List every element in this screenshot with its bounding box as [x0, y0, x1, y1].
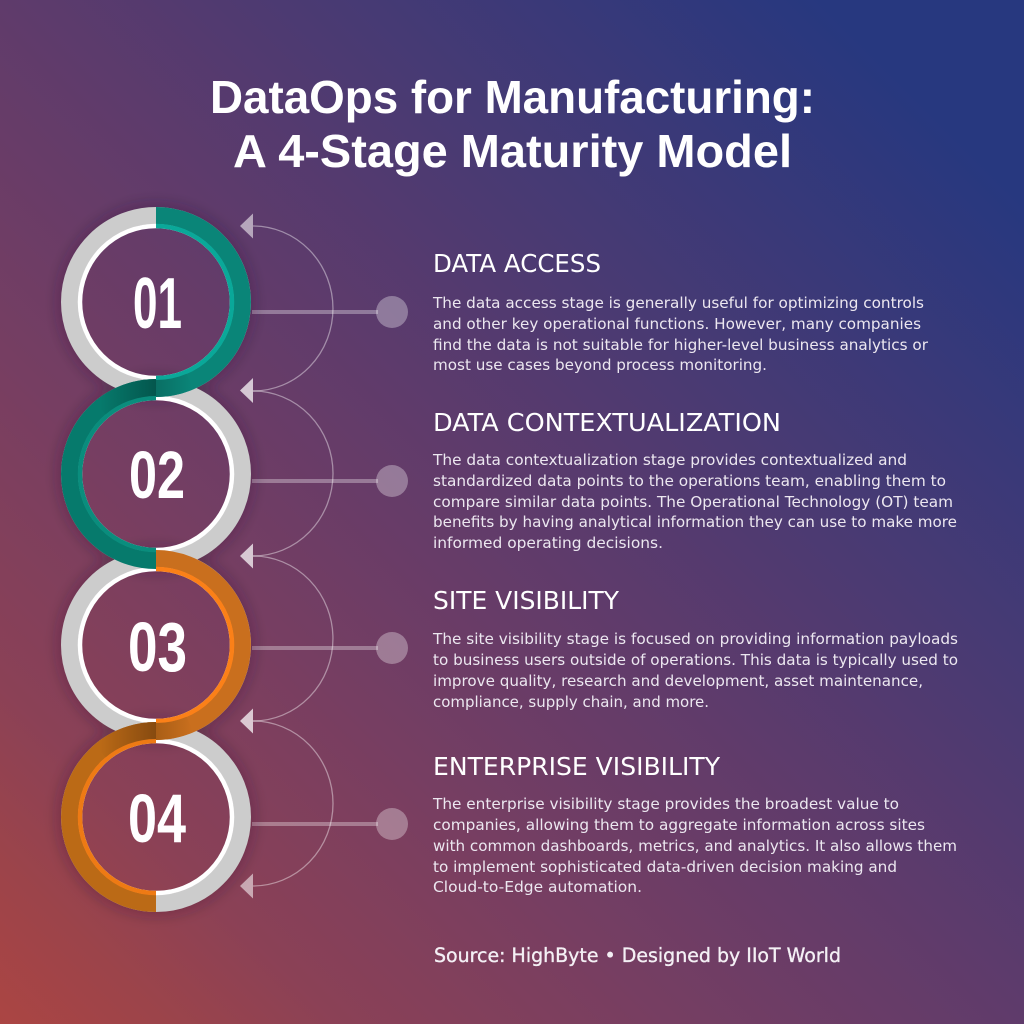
- stage 4 text: Cloud-to-Edge automation.: [433, 878, 642, 896]
- stage 1 text: most use cases beyond process monitoring.: [433, 356, 767, 374]
- title: DataOps for Manufacturing:: [210, 71, 815, 123]
- stage 4 text: companies, allowing them to aggregate information across sites: [433, 816, 925, 834]
- ring 3 orange half: [156, 558, 242, 732]
- stage 1 text: and other key operational functions. However, many companies: [433, 315, 921, 333]
- ring 4 orange half: [70, 730, 156, 904]
- ring 3 base: [70, 558, 242, 732]
- stage 2 text: [432, 408, 957, 552]
- stage 2 text: The data contextualization stage provides contextualized and: [432, 451, 907, 469]
- number 01: 01: [133, 264, 182, 344]
- source line: Source: HighByte • Designed by IIoT World: [434, 944, 841, 967]
- number 04: 04: [128, 780, 186, 857]
- stage 2 text: standardized data points to the operations team, enabling them to: [433, 472, 946, 490]
- stage 4 text: ENTERPRISE VISIBILITY: [433, 752, 721, 781]
- stage 2 text: compare similar data points. The Operational Technology (OT) team: [433, 493, 953, 511]
- stage 1 text: [432, 249, 929, 374]
- ring 4 base: [70, 730, 242, 904]
- stage 1 text: The data access stage is generally useful for optimizing controls: [432, 294, 924, 312]
- stage 3 text: The site visibility stage is focused on providing information payloads: [432, 630, 958, 648]
- ring shadows: [63, 209, 249, 910]
- stage 1 text: find the data is not suitable for higher-level business analytics or: [433, 336, 929, 354]
- leader line and dot: stage 3: [252, 632, 408, 664]
- ring 2 base: [70, 388, 242, 560]
- leader line and dot: stage 1: [252, 296, 408, 328]
- stage 4 text: to implement sophisticated data-driven decision making and: [433, 858, 897, 876]
- ring 2 teal half: [70, 387, 156, 560]
- stage 4 text: [432, 752, 957, 896]
- ring 1 teal half: [156, 216, 242, 388]
- stage 3 text: to business users outside of operations. This data is typically used to: [433, 651, 958, 669]
- ring 1 base: [70, 216, 242, 388]
- stage 1 text: DATA ACCESS: [433, 249, 601, 278]
- stage 2 text: benefits by having analytical information they can use to make more: [433, 513, 957, 531]
- stage 3 text: compliance, supply chain, and more.: [433, 693, 709, 711]
- leader line and dot: stage 4: [252, 808, 408, 840]
- connector arcs with arrowheads: [240, 214, 333, 898]
- stage 3 text: improve quality, research and development, asset maintenance,: [433, 672, 923, 690]
- stage 4 text: with common dashboards, metrics, and analytics. It also allows them: [433, 837, 957, 855]
- number 02: 02: [129, 438, 185, 513]
- stage 3 text: SITE VISIBILITY: [433, 586, 620, 615]
- leader line and dot: stage 2: [252, 465, 408, 497]
- stage 3 text: [432, 586, 958, 711]
- number 03: 03: [128, 608, 187, 686]
- stage 2 text: DATA CONTEXTUALIZATION: [433, 408, 781, 437]
- title: [210, 71, 815, 177]
- stage 2 text: informed operating decisions.: [433, 534, 663, 552]
- stage 4 text: The enterprise visibility stage provides the broadest value to: [432, 795, 899, 813]
- title: A 4-Stage Maturity Model: [233, 125, 792, 177]
